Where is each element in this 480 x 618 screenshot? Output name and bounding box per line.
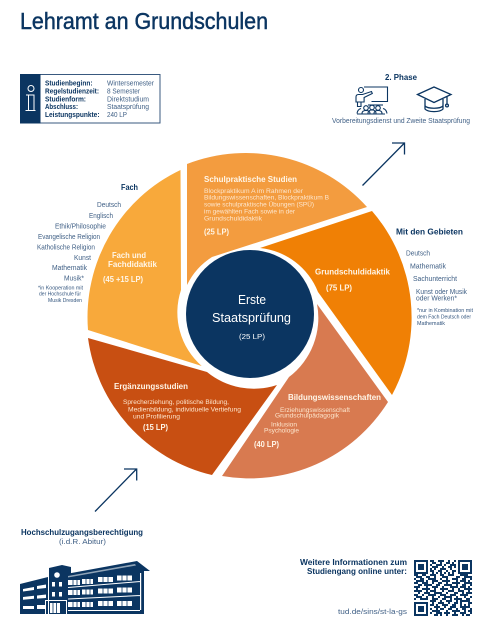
segment: Schulpraktische Studien: Blockpraktikum A im Rahmen der <box>204 188 304 195</box>
segment: Schulpraktische Studien: (25 LP) <box>204 227 229 236</box>
list: Mit den Gebieten: Sachunterricht <box>413 276 457 283</box>
segment: Schulpraktische Studien <box>187 153 367 285</box>
list: Fach: Katholische Religion <box>37 244 95 252</box>
panel: 2. Phase: 2. Phase <box>385 73 418 82</box>
segment: Bildungswissenschaften: Inklusion <box>271 422 297 429</box>
facts labels <box>45 78 100 119</box>
list: Fach: Mathematik <box>52 265 87 272</box>
centre: Erste Staatsprüfung: Staatsprüfung <box>212 310 291 325</box>
segment: Fach und Fachdidaktik: Fach und <box>112 251 146 260</box>
heading: Hochschulzugangsberechtigung <box>21 528 143 546</box>
segment: Bildungswissenschaften: Psychologie <box>264 427 299 434</box>
segment: Ergänzungsstudien: Ergänzungsstudien <box>114 382 188 391</box>
list: Mit den Gebieten <box>396 228 474 327</box>
text: further information: Studiengang online unter: <box>307 567 407 576</box>
facts values: Staatsprüfung <box>107 102 149 111</box>
segment: Grundschuldidaktik: (75 LP) <box>326 284 352 293</box>
facts values: Direktstudium <box>107 94 149 103</box>
segment: Fach und Fachdidaktik: Fachdidaktik <box>108 260 158 269</box>
list: Mit den Gebieten: oder Werken* <box>416 296 457 303</box>
segment: Fach und Fachdidaktik <box>87 170 202 366</box>
segment: Grundschuldidaktik: Grundschuldidaktik <box>315 268 391 277</box>
segment: Ergänzungsstudien: und Profilierung <box>133 414 180 421</box>
list: Fach: Ethik/Philosophie <box>55 224 106 230</box>
centre: Erste Staatsprüfung: Erste <box>238 292 266 307</box>
text: further information: Weitere Informationen zum <box>300 558 407 567</box>
list: Mit den Gebieten: Kunst oder Musik <box>416 289 467 296</box>
list: Fach: *in Kooperation mit <box>38 286 84 292</box>
list: Fach: Fach <box>121 183 138 192</box>
list: Fach: Deutsch <box>97 202 121 209</box>
list: Fach: Kunst <box>74 255 91 262</box>
segment: Grundschuldidaktik <box>260 211 412 395</box>
chart: study segments <box>87 153 412 478</box>
panel: study facts <box>20 74 160 124</box>
facts labels: Leistungspunkte: <box>45 110 100 119</box>
panel: 2. Phase <box>332 73 470 125</box>
centre: Erste Staatsprüfung <box>186 250 314 378</box>
segment: Schulpraktische Studien: sowie schulpraktische Übungen (SPÜ) <box>204 200 314 208</box>
title: Lehramt an Grundschulen <box>20 8 268 34</box>
facts labels: Studienform: <box>45 94 86 103</box>
list: Mit den Gebieten: Deutsch <box>406 251 430 258</box>
segment: Ergänzungsstudien <box>88 338 277 475</box>
list: Fach: Musik Dresden <box>48 298 82 304</box>
text: further information <box>300 558 407 616</box>
list: Fach: Musik* <box>64 276 84 282</box>
list: Mit den Gebieten: Mathematik <box>410 264 446 270</box>
list: Mit den Gebieten: Mathematik <box>417 321 446 327</box>
segment: Fach und Fachdidaktik: (45 +15 LP) <box>103 275 143 284</box>
segment: Ergänzungsstudien: (15 LP) <box>143 423 168 432</box>
heading: Hochschulzugangsberechtigung: Hochschulzugangsberechtigung <box>21 528 143 537</box>
list: Fach: Evangelische Religion <box>38 234 100 241</box>
segment: Bildungswissenschaften: Grundschulpädagogik <box>275 413 340 420</box>
facts values: Wintersemester <box>107 78 155 88</box>
segment: Ergänzungsstudien: Medienbildung, individuelle Vertiefung <box>128 407 241 414</box>
list: Fach <box>37 183 138 304</box>
segment: Schulpraktische Studien: im gewählten Fach sowie in der <box>204 209 296 216</box>
segment: Schulpraktische Studien: Grundschuldidaktik <box>204 215 263 222</box>
icon: info <box>26 86 36 110</box>
segment: Bildungswissenschaften: Bildungswissenschaften <box>288 393 381 402</box>
facts labels: Regelstudienzeit: <box>45 86 99 96</box>
icon: QR code <box>414 560 472 616</box>
segment: Bildungswissenschaften: Erziehungswissenschaft <box>280 407 350 414</box>
icon: teacher at board <box>356 87 388 114</box>
list: Mit den Gebieten: *nur in Kombination mit <box>417 308 474 314</box>
icon: university building <box>20 561 150 614</box>
segment: Schulpraktische Studien: Schulpraktische Studien <box>204 175 297 184</box>
segment: Schulpraktische Studien: Bildungswissenschaften, Blockpraktikum B <box>204 195 330 202</box>
segment: Bildungswissenschaften: (40 LP) <box>254 440 279 449</box>
heading: Hochschulzugangsberechtigung: (i.d.R. Abitur) <box>59 539 106 546</box>
list: Mit den Gebieten: dem Fach Deutsch oder <box>417 315 471 321</box>
facts values: 8 Semester <box>107 86 141 96</box>
text: further information: tud.de/sins/st-la-gs <box>338 607 407 616</box>
facts labels: Studienbeginn: <box>45 78 92 88</box>
facts labels: Abschluss: <box>45 102 78 111</box>
list: Mit den Gebieten: Mit den Gebieten <box>396 228 463 236</box>
facts values: 240 LP <box>107 110 127 119</box>
centre: Erste Staatsprüfung: (25 LP) <box>239 332 266 341</box>
arrow: to 2. Phase <box>362 143 404 186</box>
icon: graduation cap <box>418 87 451 112</box>
segment: Ergänzungsstudien: Sprecherziehung, politische Bildung, <box>123 399 229 406</box>
segment: Bildungswissenschaften <box>222 304 388 478</box>
arrow: from Hochschulzugangsberechtigung <box>95 469 137 512</box>
phase caption: Vorbereitungsdienst und Zweite Staatsprüfung <box>332 118 470 125</box>
list: Fach: der Hochschule für <box>39 292 81 298</box>
facts values <box>107 78 155 119</box>
list: Fach: Englisch <box>89 213 113 220</box>
